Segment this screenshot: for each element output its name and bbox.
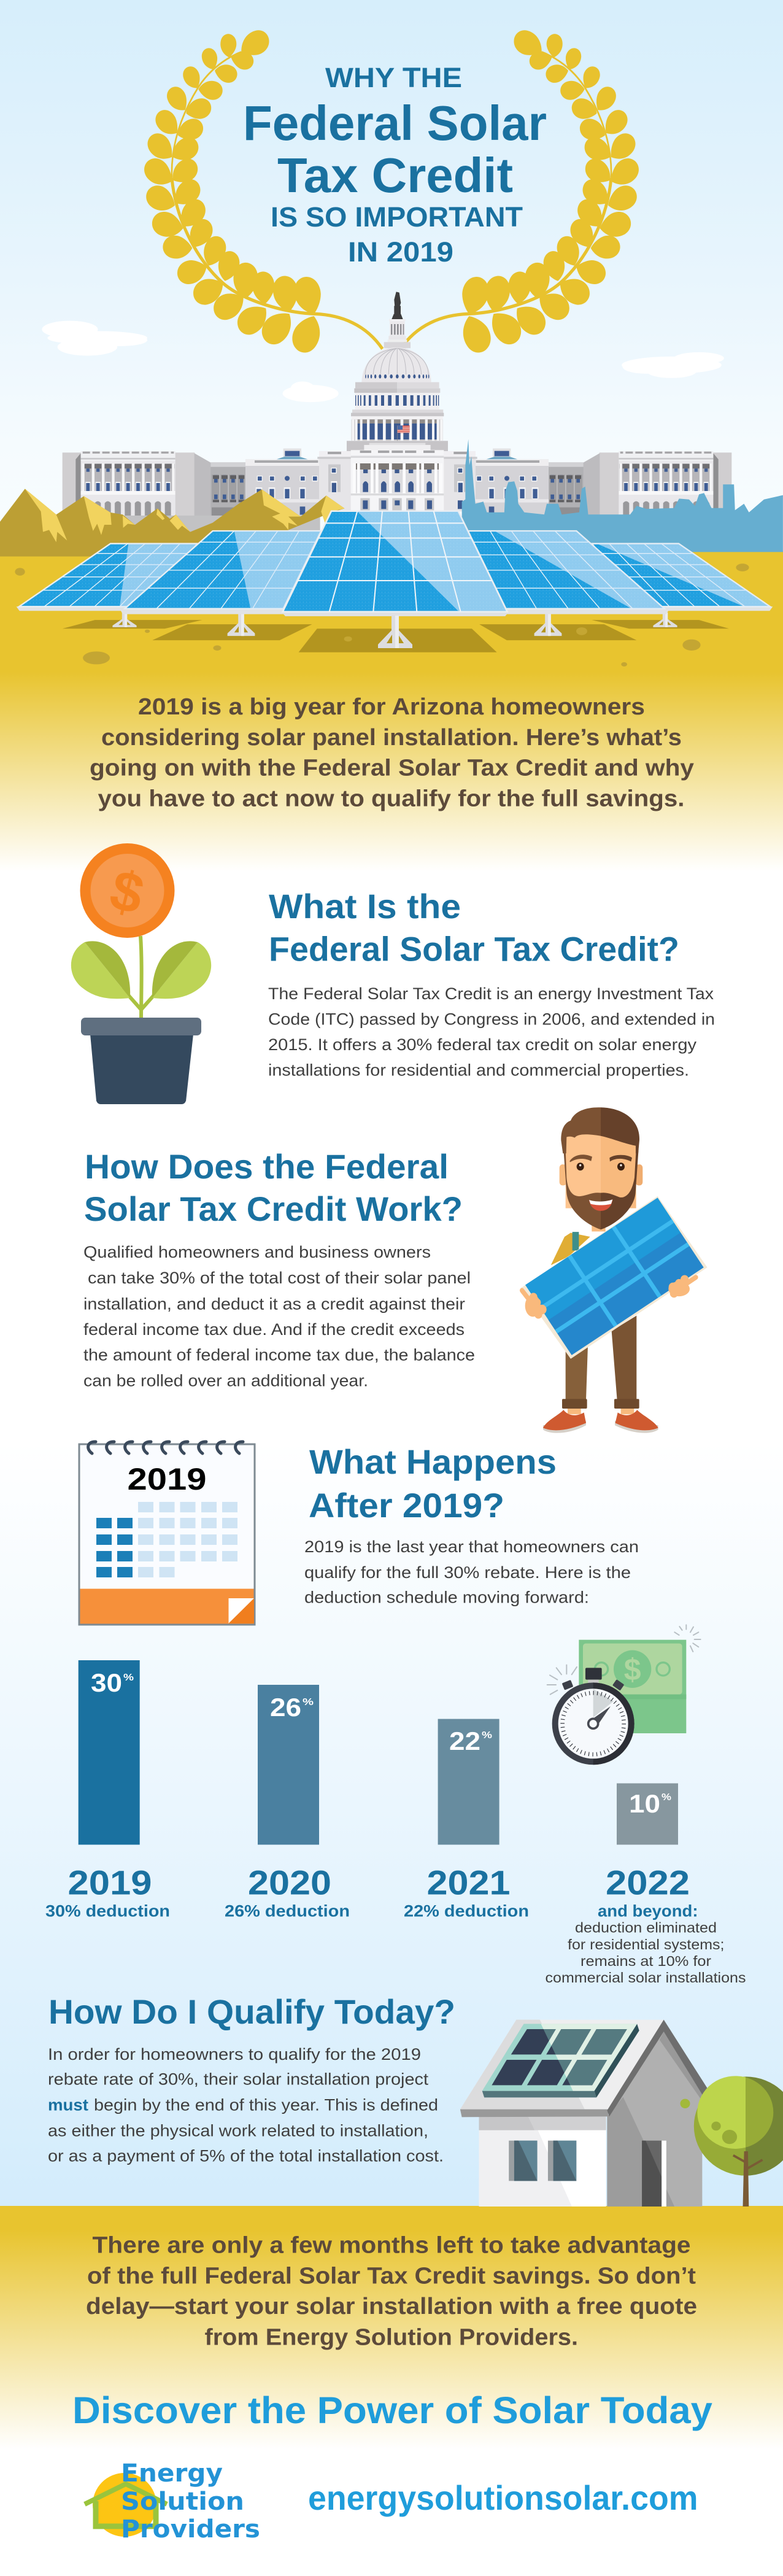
- bar 2019: 30: [91, 1668, 122, 1697]
- icon: money flower in pot: $: [104, 858, 150, 927]
- text: how does it work: federal income tax due. And if the credit exceeds: [83, 1320, 465, 1339]
- icon: house with solar roof: [460, 2020, 783, 2207]
- heading: how does it work: How Does the Federal: [85, 1147, 449, 1186]
- chart labels: 2019: [68, 1863, 152, 1901]
- icon: calendar: [79, 1442, 255, 1625]
- rocks: [15, 563, 749, 667]
- bar 2021: [438, 1719, 500, 1845]
- heading: what happens after 2019: After 2019?: [309, 1486, 504, 1525]
- mountains: [0, 489, 345, 557]
- call to action paragraph: There are only a few months left to take advantage: [92, 2233, 691, 2259]
- text: how do i qualify: or as a payment of 5% of the total installation cost.: [48, 2147, 444, 2165]
- cash stack: [579, 1640, 686, 1733]
- heading: what is the credit: Federal Solar Tax Credit?: [269, 929, 679, 969]
- text: what is the credit: The Federal Solar Tax Credit is an energy Investment Tax: [268, 984, 714, 1003]
- center stand: [378, 616, 412, 648]
- text: how do i qualify: as either the physical work related to installation,: [48, 2121, 428, 2140]
- text: how do i qualify: rebate rate of 30%, their solar installation project: [48, 2070, 429, 2088]
- chart labels: 22% deduction: [404, 1901, 529, 1920]
- roof solar panel: [482, 2024, 639, 2097]
- shirt: [551, 1224, 606, 1265]
- background: lower ground fading to white: [0, 2206, 783, 2449]
- title: Federal Solar: [243, 96, 547, 150]
- logo: Energy: [121, 2459, 223, 2488]
- text: how does it work: can take 30% of the total cost of their solar panel: [88, 1269, 471, 1287]
- bar 2020: [258, 1685, 319, 1845]
- heading: what happens after 2019: What Happens: [309, 1442, 557, 1481]
- text: how does it work: [83, 1243, 475, 1390]
- text: what is the credit: 2015. It offers a 30% federal tax credit on solar energy: [268, 1035, 697, 1054]
- laurel wreath: right branch: [401, 26, 643, 357]
- intro paragraph: considering solar panel installation. Here’s what’s: [101, 725, 682, 751]
- american flag: [398, 425, 410, 433]
- text: how does it work: the amount of federal income tax due, the balance: [83, 1345, 475, 1364]
- head: [560, 1107, 642, 1229]
- capitol central building and dome: [317, 292, 477, 511]
- title: IS SO IMPORTANT: [271, 201, 523, 233]
- calendar rings: [88, 1442, 243, 1453]
- text: how do i qualify: [48, 2045, 444, 2165]
- bar 2019: %: [123, 1673, 134, 1683]
- bar chart: [79, 1660, 678, 1845]
- bar 2022: %: [662, 1792, 671, 1803]
- laurel wreath: left branch: [140, 26, 382, 357]
- bar 2019: [79, 1660, 140, 1845]
- legs: [562, 1316, 639, 1414]
- call to action paragraph: delay—start your solar installation with a free quote: [86, 2294, 697, 2319]
- text: what is the credit: installations for residential and commercial properties.: [268, 1061, 689, 1079]
- solar panel far right: [592, 544, 773, 611]
- intro paragraph: [90, 694, 694, 811]
- cash stack: $: [624, 1652, 641, 1687]
- tree: [694, 2076, 783, 2207]
- bar 2021: %: [482, 1730, 492, 1741]
- 2022 note: deduction eliminated: [575, 1920, 717, 1936]
- solar panel right: [468, 531, 669, 614]
- text: what happens after 2019: 2019 is the last year that homeowners can: [304, 1537, 639, 1556]
- heading: how does it work: Solar Tax Credit Work?: [84, 1189, 463, 1228]
- city skyline: [462, 439, 783, 552]
- text: how does it work: installation, and deduct it as a credit against their: [83, 1295, 465, 1313]
- title: IN 2019: [348, 236, 453, 268]
- chart labels: 2022: [606, 1863, 690, 1901]
- logo: Solution: [121, 2488, 244, 2516]
- clouds: [42, 321, 724, 402]
- intro paragraph: going on with the Federal Solar Tax Credit and why: [90, 755, 694, 781]
- title: [243, 62, 547, 268]
- shadows under panels: [63, 620, 729, 652]
- text: how does it work: can be rolled over an additional year.: [83, 1371, 368, 1390]
- heading: what is the credit: [269, 887, 679, 969]
- website url: energysolutionsolar.com: [308, 2478, 698, 2517]
- door: [642, 2141, 666, 2207]
- heading: what happens after 2019: [309, 1442, 557, 1525]
- title: WHY THE: [325, 62, 462, 93]
- calendar day grid: [138, 1502, 237, 1577]
- call to action paragraph: [86, 2233, 697, 2351]
- 2022 note: remains at 10% for: [580, 1953, 711, 1969]
- text: how do i qualify: must: [48, 2095, 88, 2114]
- text: what happens after 2019: qualify for the full 30% rebate. Here is the: [304, 1563, 631, 1582]
- chart labels: 2020: [248, 1863, 331, 1901]
- text: what happens after 2019: [304, 1537, 639, 1607]
- icon: cash and stopwatch: [547, 1625, 701, 1765]
- solar panel left: [120, 531, 321, 614]
- call to action paragraph: from Energy Solution Providers.: [205, 2325, 578, 2351]
- title: Tax Credit: [277, 148, 513, 203]
- text: what is the credit: Code (ITC) passed by Congress in 2006, and extended in: [268, 1010, 715, 1029]
- bar 2022: [617, 1784, 678, 1845]
- shoes: [543, 1410, 658, 1433]
- text: what is the credit: [268, 984, 715, 1079]
- heading: what is the credit: What Is the: [269, 887, 461, 926]
- roof: [460, 2020, 710, 2117]
- background: white middle and blue gradient: [0, 1442, 783, 2207]
- 2022 note: [545, 1920, 746, 1986]
- bar 2020: %: [303, 1697, 314, 1708]
- intro paragraph: you have to act now to qualify for the full savings.: [98, 786, 685, 811]
- bar 2020: 26: [270, 1693, 301, 1722]
- icon: calendar: 2019: [128, 1462, 206, 1496]
- chart labels: and beyond:: [598, 1901, 698, 1920]
- tagline: Discover the Power of Solar Today: [72, 2389, 712, 2431]
- windows: [509, 2141, 576, 2181]
- house walls: [479, 2032, 703, 2207]
- capitol left wing: [63, 449, 320, 533]
- chart labels: 30% deduction: [45, 1901, 170, 1920]
- text: how do i qualify: begin by the end of this year. This is defined: [94, 2095, 438, 2114]
- 2022 note: for residential systems;: [568, 1936, 724, 1952]
- intro paragraph: 2019 is a big year for Arizona homeowners: [138, 694, 645, 720]
- logo: [85, 2459, 260, 2543]
- icon: money flower in pot: [71, 843, 211, 1104]
- icon: man holding solar panel: [520, 1107, 708, 1433]
- chart labels: 2021: [427, 1863, 511, 1901]
- text: what happens after 2019: deduction schedule moving forward:: [304, 1588, 589, 1607]
- capitol right wing: [474, 449, 731, 533]
- 2022 note: commercial solar installations: [545, 1970, 746, 1986]
- solar panel center: [281, 511, 509, 616]
- chart labels: [45, 1863, 698, 1920]
- background: ground fading to white: [0, 551, 783, 878]
- solar panel far left: [17, 544, 198, 611]
- held solar panel: [520, 1196, 708, 1359]
- heading: how do i qualify: How Do I Qualify Today?: [48, 1992, 455, 2031]
- hands: [522, 1275, 696, 1319]
- call to action paragraph: of the full Federal Solar Tax Credit savings. So don’t: [87, 2264, 696, 2289]
- solar panel stands: [112, 613, 677, 636]
- text: how do i qualify: In order for homeowners to qualify for the 2019: [48, 2045, 421, 2064]
- text: how does it work: Qualified homeowners and business owners: [83, 1243, 431, 1261]
- chart labels: 26% deduction: [225, 1901, 350, 1920]
- bar 2022: 10: [629, 1789, 660, 1818]
- bar 2021: 22: [449, 1727, 480, 1755]
- heading: how does it work: [84, 1147, 463, 1228]
- background: sky gradient: [0, 0, 783, 552]
- logo: Providers: [121, 2515, 260, 2543]
